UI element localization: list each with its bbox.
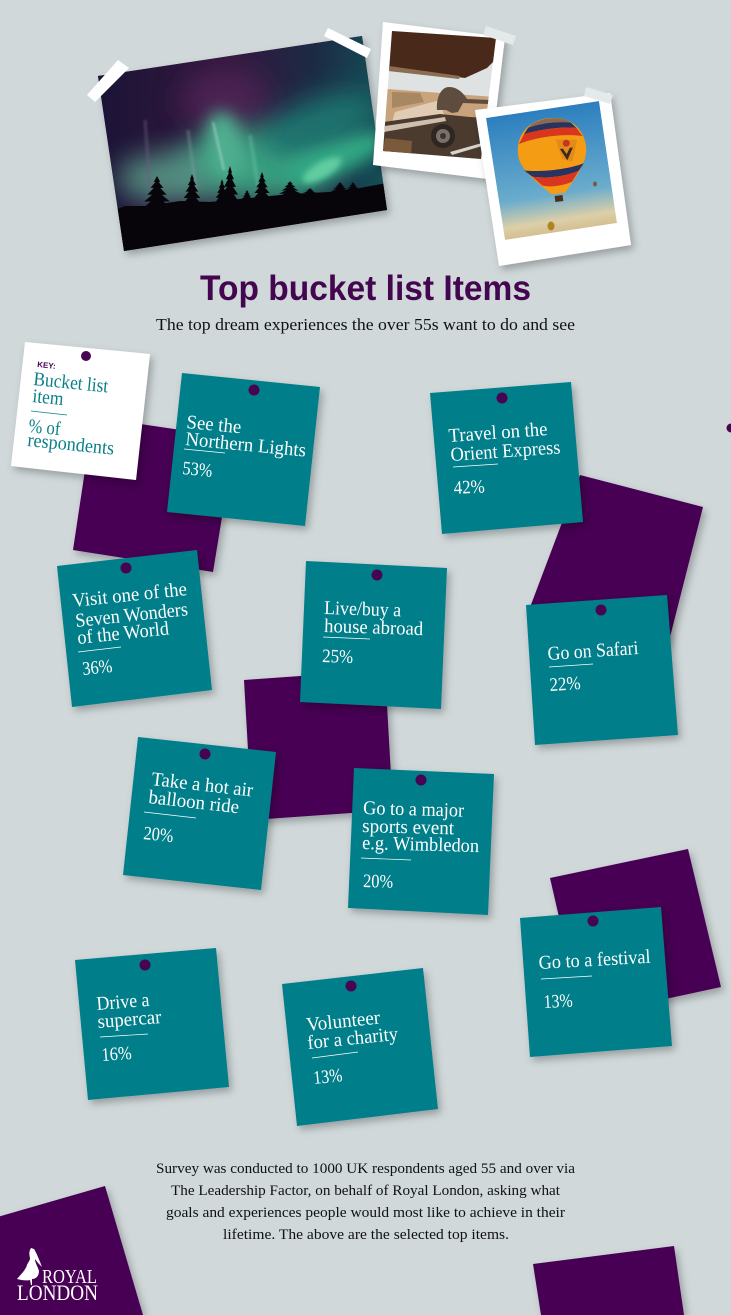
purple corner bottom left [0,1186,143,1315]
pin [596,604,606,616]
note: festival: Go to a festival [538,947,652,974]
note: house abroad [300,561,447,709]
elephant [437,87,490,113]
pin [588,916,598,926]
note: hot air balloon [123,737,276,890]
subtitle: The top dream experiences the over 55s want to do and see [156,315,575,334]
note: northern lights [167,373,320,526]
pin [372,570,382,580]
purple note 4 [550,849,721,1017]
note: orient express [430,382,583,534]
note: hot air balloon: Take a hot air [150,769,255,802]
note: sports event: Go to a major [363,798,465,822]
footer text: goals and experiences people would most like to achieve in their [166,1205,565,1221]
key text [27,369,115,460]
footer text: lifetime. The above are the selected top items. [223,1227,509,1243]
key text: Bucket list [33,369,110,397]
note: hot air balloon: balloon ride [147,787,240,818]
note: volunteer: 13% [312,1065,343,1089]
pin [200,748,210,760]
footer text: The Leadership Factor, on behalf of Royal London, asking what [171,1183,561,1199]
tape [87,60,129,102]
note: festival: 13% [543,990,573,1013]
logo: Royal London: LONDON [17,1280,98,1305]
purple note 3 [244,670,393,820]
key label: KEY: [37,360,56,371]
note: northern lights: 53% [182,458,214,482]
photo: hot air balloon polaroid [475,87,631,266]
photo: northern lights [87,28,395,260]
note: seven wonders: 36% [81,656,114,680]
balloon [518,118,586,202]
note: sports event [348,768,494,915]
icon: pelican [17,1248,42,1285]
tape [324,28,371,58]
logo: Royal London [17,1248,98,1305]
logo: Royal London: ROYAL [42,1266,97,1288]
note: volunteer [282,968,438,1126]
tape [483,26,516,45]
photo: elephant safari polaroid [373,22,516,179]
note: supercar [75,948,229,1100]
note: supercar: supercar [97,1007,163,1033]
note: festival [520,907,672,1057]
note: supercar: Drive a [96,990,151,1015]
pin [140,960,150,970]
pin [120,562,132,574]
pin [346,980,356,992]
note: safari: Go on Safari [547,638,640,665]
note: volunteer: Volunteer [305,1008,382,1036]
pin [416,774,426,786]
key note [11,342,150,480]
note: safari [526,595,678,745]
tape [584,87,613,104]
note: house abroad: 25% [322,646,354,668]
note: orient express: Orient Express [450,437,561,466]
note: sports event: 20% [363,871,394,893]
pin: right edge [726,424,731,432]
note: seven wonders [57,550,212,707]
pin [496,392,508,404]
note: house abroad: house abroad [324,616,424,640]
tree silhouettes [118,166,387,251]
note: northern lights: See the [186,412,242,438]
key text: % of [28,416,62,440]
pin [81,351,91,361]
note: seven wonders: Seven Wonders [74,599,189,632]
note: supercar: 16% [101,1043,132,1066]
purple note 1 [73,417,235,572]
footer text [156,1161,575,1243]
footer text: Survey was conducted to 1000 UK respondents aged 55 and over via [156,1161,575,1177]
note: sports event: sports event [362,816,455,839]
note: house abroad: Live/buy a [324,598,402,621]
pin [248,384,260,396]
note: hot air balloon: 20% [142,823,175,847]
note: sports event: e.g. Wimbledon [362,833,480,857]
purple corner bottom right [533,1246,684,1315]
title: Top bucket list Items [200,268,531,308]
note: orient express: Travel on the [448,419,548,447]
note: seven wonders: Visit one of the [71,579,188,612]
note: safari: 22% [549,673,581,696]
purple note 2 [529,475,703,645]
note: orient express: 42% [453,476,485,499]
key text: respondents [27,430,115,460]
note: northern lights: Northern Lights [185,429,307,462]
note: seven wonders: of the World [76,618,170,649]
key text: item [32,386,64,410]
note: volunteer: for a charity [306,1024,399,1054]
